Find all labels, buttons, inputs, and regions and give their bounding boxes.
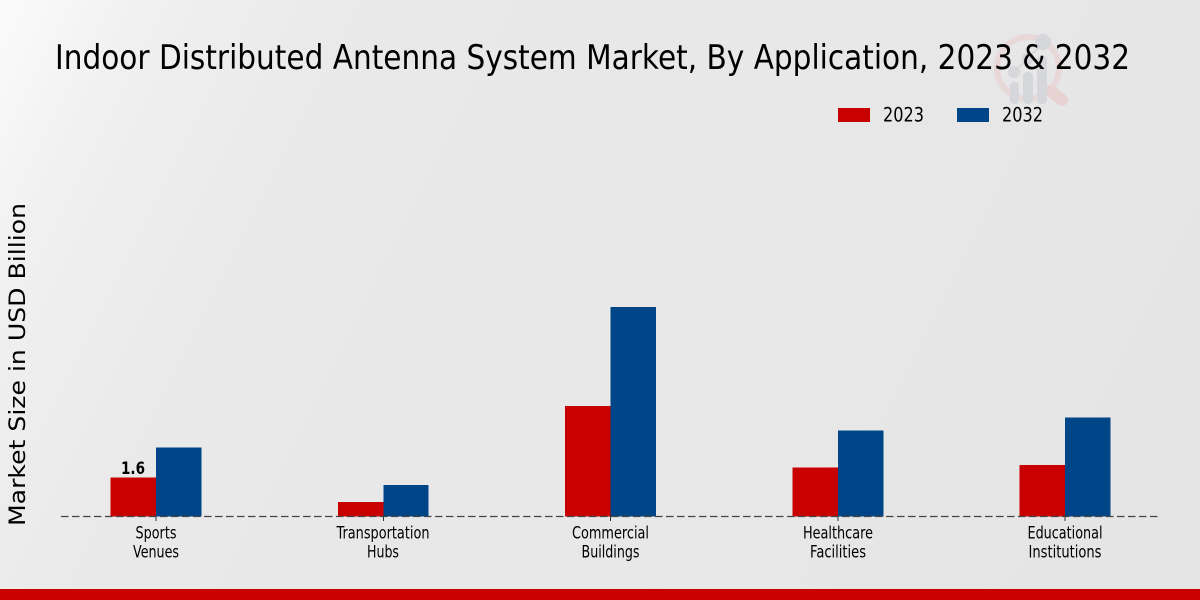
- axis label: Healthcare Facilities: Facilities: [810, 542, 866, 562]
- bars: Healthcare Facilities: [792, 430, 884, 516]
- axis label: Transportation Hubs: Transportation: [336, 524, 430, 544]
- axis label: Healthcare Facilities: Healthcare: [803, 524, 873, 544]
- data label: 1.6: 1.6: [121, 459, 145, 478]
- legend item: 2032: 2032: [1002, 104, 1043, 126]
- bar chart: [61, 307, 1160, 521]
- bars: Educational Institutions: [1020, 418, 1110, 516]
- axis label: Sports Venues: Venues: [133, 542, 179, 562]
- legend item: 2023: 2023: [883, 104, 924, 126]
- icon: watermark logo: [997, 34, 1062, 104]
- axis label: Commercial Buildings: Buildings: [582, 542, 640, 562]
- footer bar: [0, 589, 1200, 600]
- bars: Sports Venues: [110, 448, 202, 516]
- axis label: Educational Institutions: Educational: [1028, 524, 1102, 544]
- axis label: Sports Venues: [133, 524, 179, 562]
- legend item: 2023: [838, 104, 924, 126]
- legend: [838, 104, 1043, 126]
- axis label: Educational Institutions: [1028, 524, 1102, 562]
- axis label: Sports Venues: Sports: [136, 524, 177, 544]
- y-axis title: Market Size in USD Billion: [5, 203, 31, 526]
- bars: Commercial Buildings: [565, 307, 656, 516]
- axis label: Commercial Buildings: [572, 524, 649, 562]
- axis label: Commercial Buildings: Commercial: [572, 524, 649, 544]
- axis label: Educational Institutions: Institutions: [1028, 542, 1102, 562]
- bars: Transportation Hubs: [338, 485, 428, 516]
- axis label: Transportation Hubs: [336, 524, 430, 562]
- legend item: 2032: [957, 104, 1043, 126]
- axis label: Transportation Hubs: Hubs: [367, 542, 399, 562]
- axis label: Healthcare Facilities: [803, 524, 873, 562]
